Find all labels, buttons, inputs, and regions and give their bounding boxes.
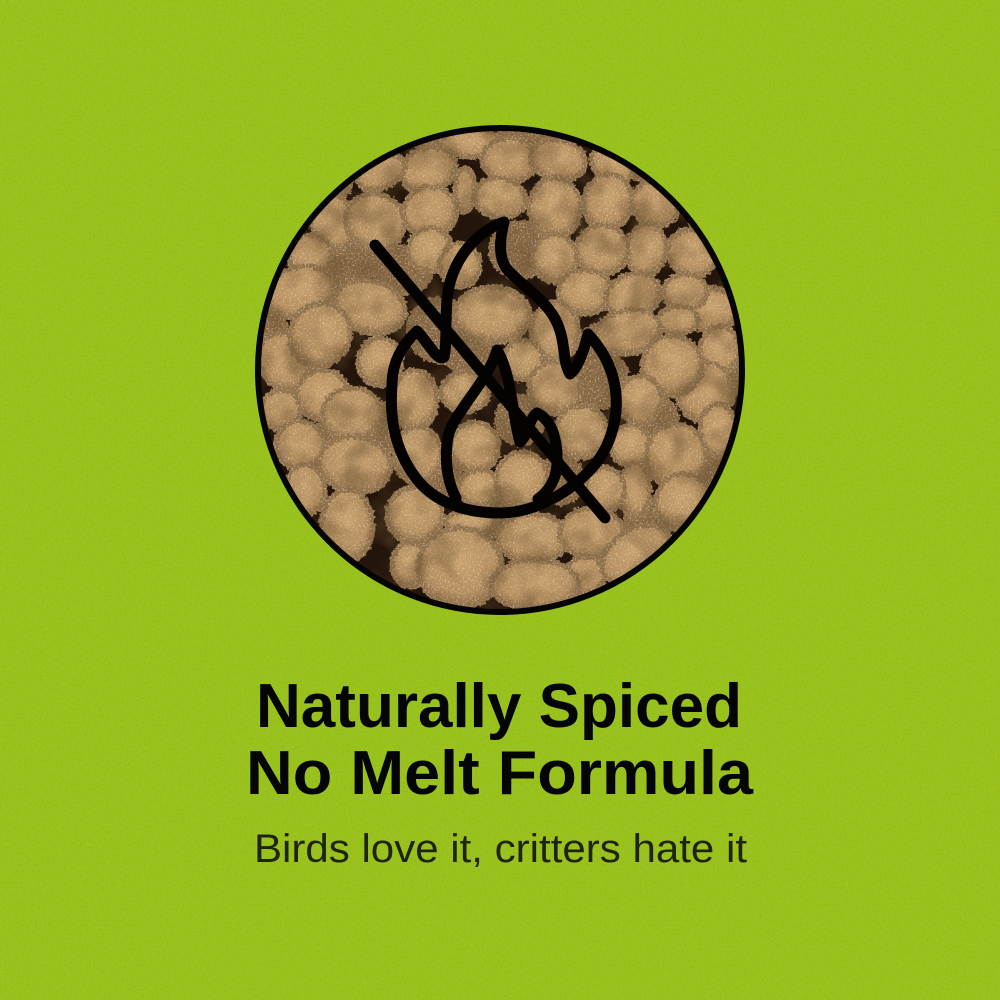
flame inner outline (446, 350, 557, 499)
heading: product claim: Naturally Spiced (256, 672, 742, 741)
flame outer outline (391, 222, 616, 513)
subheading: Birds love it, critters hate it (254, 827, 747, 871)
heading: product claim: No Melt Formula (246, 739, 754, 808)
strike-through line (375, 245, 605, 518)
pellets (248, 115, 750, 620)
circle border (258, 128, 742, 612)
panel: circular photo of suet pellets (248, 115, 750, 620)
icon: crossed-out flame (375, 222, 616, 518)
heading: product claim (246, 672, 754, 808)
